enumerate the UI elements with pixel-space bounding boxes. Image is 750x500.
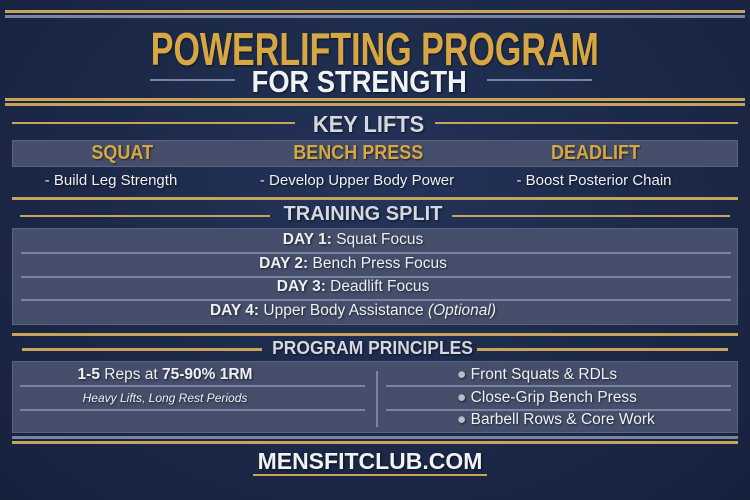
panel: program principles: ● Barbell Rows & Core Work <box>457 411 655 428</box>
heading: training split: TRAINING SPLIT <box>284 203 442 225</box>
panel: training split days: DAY 2: Bench Press Focus <box>259 255 447 272</box>
lift descriptions: - Boost Posterior Chain <box>516 172 672 189</box>
subtitle: FOR STRENGTH <box>251 64 467 99</box>
lift: bench press: BENCH PRESS <box>293 142 423 164</box>
lift: deadlift: DEADLIFT <box>550 142 639 164</box>
heading: program principles <box>22 338 728 358</box>
footer url: MENSFITCLUB.COM <box>258 448 482 474</box>
panel: training split days <box>12 228 738 325</box>
panel: program principles <box>12 361 738 433</box>
double gold divider <box>5 98 745 106</box>
panel: training split days: DAY 3: Deadlift Focus <box>277 278 429 295</box>
lift descriptions <box>45 172 672 190</box>
heading: program principles: PROGRAM PRINCIPLES <box>273 338 473 358</box>
title: POWERLIFTING PROGRAM <box>151 23 599 75</box>
panel: training split days: DAY 4: Upper Body Assistance (Optional) <box>210 302 496 319</box>
panel: program principles: ● Close-Grip Bench Press <box>457 389 637 406</box>
left column: reps: 1-5 Reps at 75-90% 1RM <box>78 366 252 383</box>
bottom border lines <box>12 436 738 444</box>
panel: program principles: ● Front Squats & RDLs <box>457 366 617 383</box>
lift descriptions: - Develop Upper Body Power <box>260 172 454 189</box>
panel: key lifts names <box>12 140 738 167</box>
lift: squat: SQUAT <box>91 142 153 164</box>
right column: assistance lifts <box>386 385 731 387</box>
top border lines <box>5 10 745 18</box>
heading: key lifts: KEY LIFTS <box>313 111 425 137</box>
panel: program principles: Heavy Lifts, Long Rest Periods <box>83 391 247 405</box>
lift descriptions: - Build Leg Strength <box>45 172 177 189</box>
panel: training split days: DAY 1: Squat Focus <box>283 231 423 248</box>
